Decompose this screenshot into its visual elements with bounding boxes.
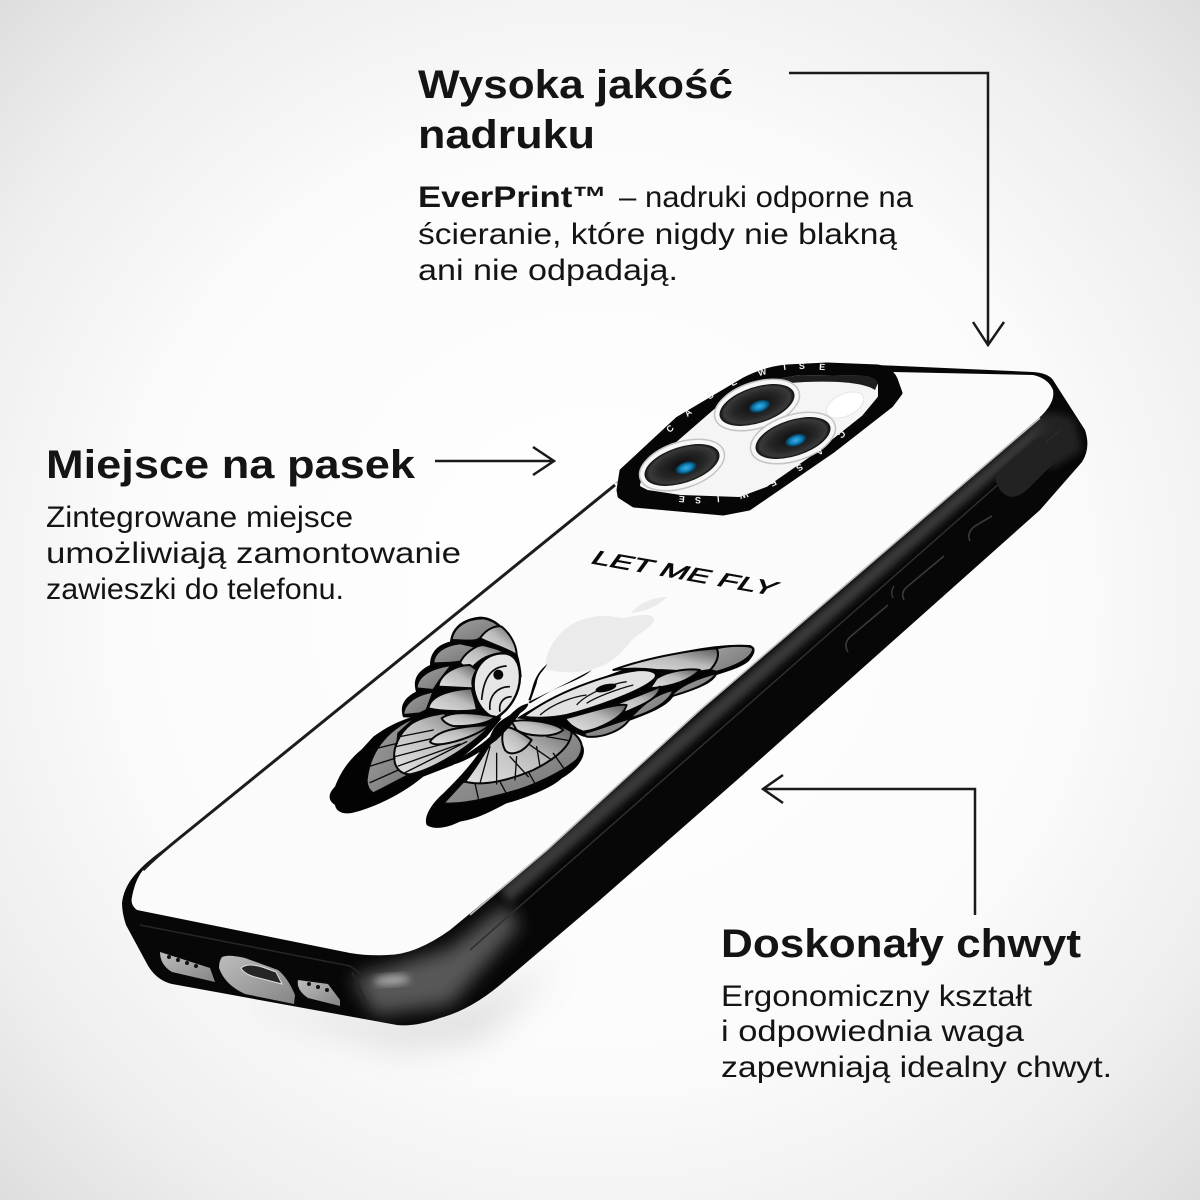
long side reflection bbox=[500, 420, 1050, 902]
heading: nadruku bbox=[418, 113, 595, 157]
heading bbox=[418, 63, 733, 157]
body text bbox=[418, 181, 914, 287]
camera ring lettering: W bbox=[757, 366, 768, 378]
lens: left bbox=[633, 430, 731, 500]
right wing shape bbox=[517, 645, 755, 737]
right speaker holes bbox=[307, 982, 329, 992]
arrow: print quality bbox=[789, 73, 1004, 345]
inner fan bbox=[465, 721, 572, 783]
upper wing inner lobes bbox=[428, 626, 517, 711]
port opening bbox=[241, 965, 282, 984]
slogan: LET ME FLY bbox=[586, 548, 783, 600]
left wing shape bbox=[330, 712, 502, 813]
charging port bbox=[219, 956, 295, 1004]
camera ring lettering: E bbox=[768, 477, 778, 489]
left wing feathers bbox=[367, 713, 495, 793]
lens: right bbox=[744, 403, 842, 473]
butterfly body bbox=[452, 703, 528, 765]
button outline lower bbox=[892, 586, 894, 598]
camera ring lettering: S bbox=[794, 462, 805, 473]
right wing feathers bbox=[565, 646, 753, 737]
top lobe bbox=[442, 713, 495, 726]
body text: – nadruki odporne na bbox=[619, 181, 914, 214]
side ridge bbox=[470, 430, 1060, 950]
body text: zapewniają idealny chwyt. bbox=[721, 1051, 1112, 1084]
camera ring lettering: E bbox=[729, 377, 739, 388]
inner fan bbox=[394, 713, 490, 774]
eye panel bbox=[474, 653, 520, 718]
dark band lower bbox=[630, 690, 673, 718]
camera ring lettering: C bbox=[664, 423, 676, 435]
body text bbox=[721, 980, 1112, 1084]
case silhouette bbox=[122, 363, 1087, 1025]
charging port and speakers bbox=[160, 952, 340, 1006]
right reflection on rim bbox=[470, 418, 1040, 915]
eye dot bbox=[493, 670, 503, 680]
right wing eye bbox=[523, 670, 656, 718]
arrow: strap slot bbox=[435, 447, 554, 475]
middle lobe bbox=[650, 669, 700, 688]
callout: print quality bbox=[418, 63, 914, 287]
body text: ani nie odpadają. bbox=[418, 254, 678, 287]
upper wing outer lobes bbox=[403, 618, 500, 715]
camera island bbox=[619, 361, 900, 513]
bottom corner gloss bbox=[352, 905, 520, 1015]
dark band inner bbox=[583, 718, 630, 737]
eye panel bbox=[523, 670, 656, 718]
camera ring lettering: I bbox=[783, 362, 787, 372]
body text bbox=[46, 501, 461, 606]
apple logo bbox=[546, 597, 667, 672]
camera ring lettering bbox=[664, 361, 847, 505]
camera ring lettering: E bbox=[678, 494, 685, 504]
camera ring lettering: S bbox=[695, 495, 701, 505]
second lobe bbox=[430, 725, 490, 744]
inner shadow bbox=[760, 375, 878, 390]
button outlines bbox=[846, 516, 992, 652]
lower wing veins bbox=[475, 737, 569, 798]
lobe right bbox=[512, 720, 563, 736]
left speaker holes bbox=[167, 955, 198, 968]
antennae bbox=[528, 664, 592, 703]
camera ring lettering: A bbox=[682, 406, 694, 419]
eye rings bbox=[482, 666, 512, 712]
screen back bbox=[132, 372, 1053, 955]
bottom ridge bbox=[140, 925, 370, 1010]
body text: EverPrint™ bbox=[418, 181, 607, 214]
heading: Wysoka jakość bbox=[418, 63, 733, 107]
camera frame bbox=[619, 365, 900, 513]
clipped side details bbox=[140, 412, 1082, 1015]
body text: Zintegrowane miejsce bbox=[46, 501, 353, 534]
lens: top bbox=[708, 370, 806, 440]
upper left wing shape bbox=[402, 617, 522, 718]
left rim line bbox=[143, 485, 615, 870]
upper band bbox=[613, 648, 718, 671]
callout: strap slot bbox=[46, 443, 461, 606]
arrow: perfect grip bbox=[763, 775, 975, 915]
outer band bbox=[443, 732, 582, 804]
camera ring lettering: S bbox=[799, 361, 805, 371]
body text: zawieszki do telefonu. bbox=[46, 573, 344, 606]
gloss highlight bbox=[374, 974, 410, 986]
eye dot bbox=[595, 682, 617, 694]
body text: ścieranie, które nigdy nie blakną bbox=[418, 218, 898, 251]
camera opening bbox=[642, 377, 876, 495]
camera ring lettering: I bbox=[717, 494, 720, 504]
heading: Doskonały chwyt bbox=[721, 922, 1081, 966]
outer band bbox=[367, 717, 417, 793]
tip bbox=[710, 646, 753, 672]
apple body bbox=[546, 615, 654, 672]
phone shadow bbox=[230, 960, 560, 1045]
wing silhouettes bbox=[330, 617, 755, 828]
left wing veins bbox=[369, 730, 467, 783]
callout: perfect grip bbox=[721, 922, 1112, 1084]
lobe left bbox=[502, 727, 532, 753]
lower wing shape bbox=[426, 718, 584, 828]
middle lobe two bbox=[610, 687, 660, 712]
lower wing feathers bbox=[443, 720, 582, 804]
body text: umożliwiają zamontowanie bbox=[46, 537, 461, 570]
butterfly bbox=[330, 617, 755, 828]
left speaker bbox=[160, 952, 215, 982]
dark band upper bbox=[667, 673, 717, 702]
phone case bbox=[122, 361, 1087, 1025]
right speaker bbox=[298, 980, 340, 1006]
apple leaf bbox=[631, 597, 667, 613]
flash bbox=[822, 387, 868, 423]
camera ring lettering: S bbox=[705, 390, 716, 401]
camera ring lettering: E bbox=[819, 362, 825, 372]
body text: i odpowiednia waga bbox=[721, 1015, 1025, 1048]
heading: Miejsce na pasek bbox=[46, 443, 416, 487]
camera ring lettering: C bbox=[836, 428, 847, 441]
camera ring lettering: W bbox=[738, 489, 749, 501]
camera ring lettering: A bbox=[814, 445, 825, 458]
eye rings bbox=[540, 682, 633, 715]
body text: Ergonomiczny kształt bbox=[721, 980, 1032, 1013]
side switch bbox=[996, 442, 1052, 497]
inner lobe bbox=[565, 705, 627, 732]
top right gloss bbox=[1030, 412, 1082, 470]
upper wing eye bbox=[474, 653, 520, 718]
